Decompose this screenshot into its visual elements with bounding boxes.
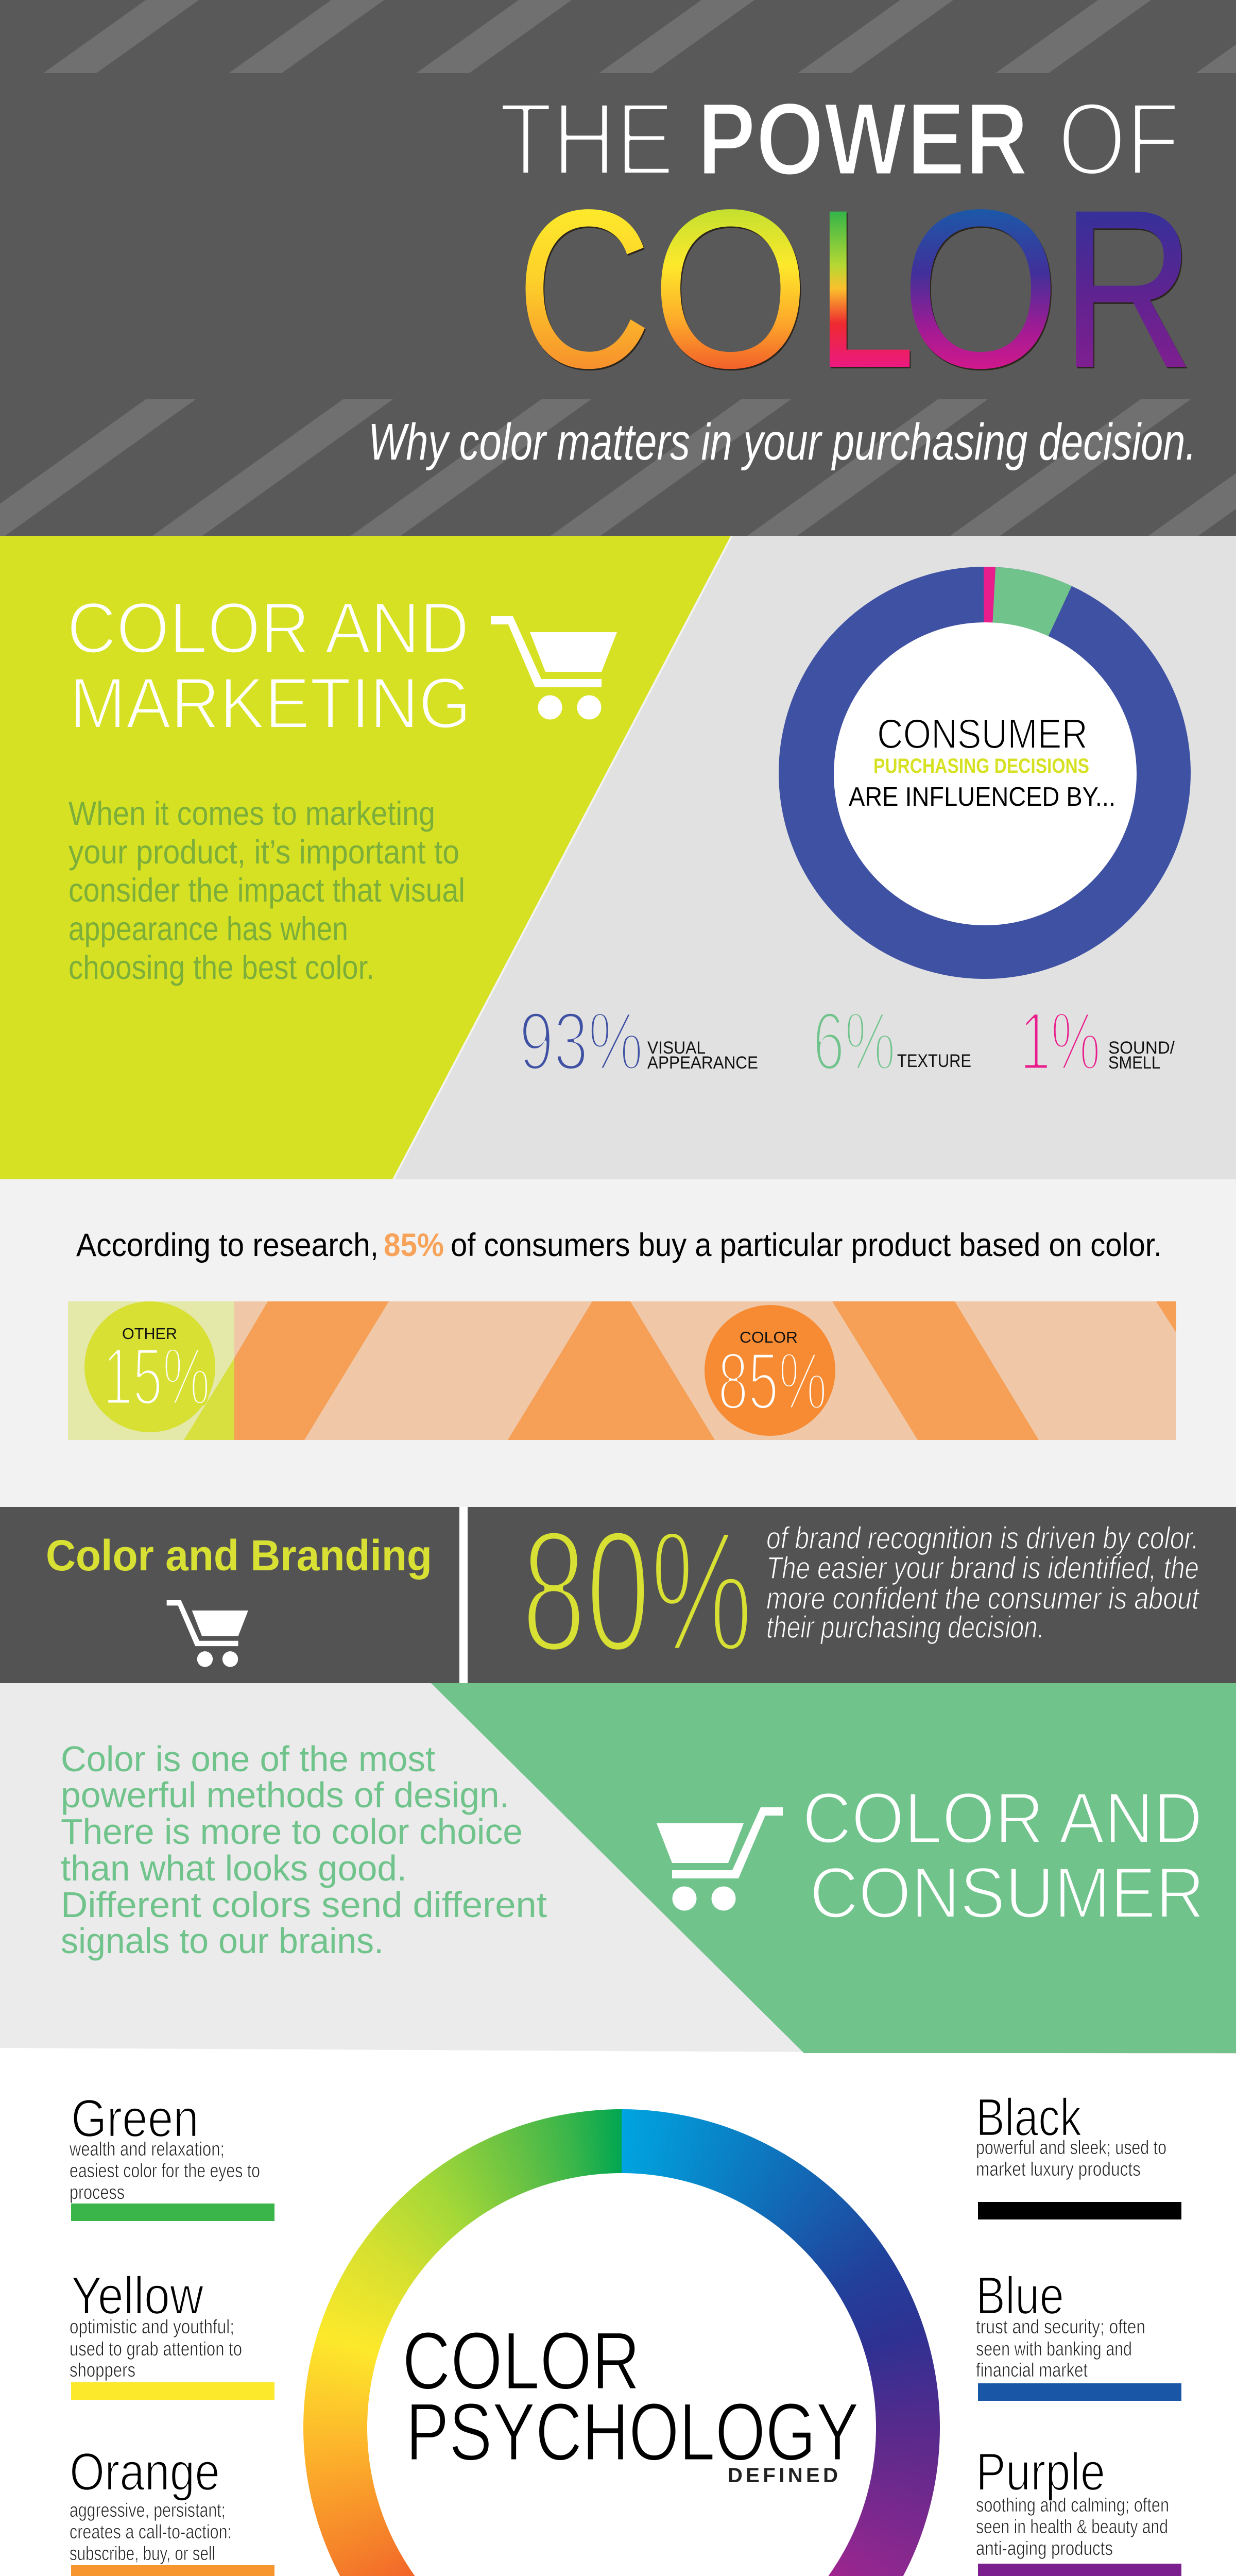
legend: blue: Blue [976, 2266, 1064, 2325]
title: color: O [901, 162, 1060, 415]
legend: black: market luxury products [976, 2159, 1141, 2180]
heading: color and marketing: MARKETING [70, 663, 471, 743]
legend: yellow: optimistic and youthful; [70, 2316, 234, 2338]
title: color [516, 162, 1195, 415]
legend: blue: trust and security; often [976, 2316, 1145, 2338]
title: the power of: THE [499, 81, 674, 197]
text block: consumer intro: There is more to color choice [61, 1811, 523, 1852]
legend: blue [976, 2266, 1181, 2401]
stat: 6% texture: 6% [813, 995, 896, 1087]
title: the power of: OF [1058, 81, 1180, 197]
legend: yellow: shoppers [70, 2360, 135, 2381]
title: the power of: POWER [697, 81, 1028, 197]
color wheel [303, 2109, 940, 2576]
legend: black [976, 2088, 1181, 2219]
panel: color and marketing [0, 536, 1236, 1179]
legend: black: powerful and sleek; used to [976, 2137, 1166, 2159]
text block: marketing intro: choosing the best color. [68, 948, 374, 986]
stat: 93% visual appearance: VISUAL [647, 1038, 706, 1058]
legend: orange [70, 2442, 274, 2576]
text block: marketing intro: consider the impact that visual [68, 871, 465, 909]
legend: purple [976, 2442, 1181, 2576]
legend: yellow: used to grab attention to [70, 2338, 242, 2360]
sentence: 85% of consumers: According to research, [76, 1227, 379, 1263]
stat: 1% sound/smell: SOUND/ [1108, 1038, 1175, 1058]
legend: black: Black [976, 2088, 1082, 2147]
panel: 85 percent research [0, 1179, 1236, 1507]
panel: color and branding [0, 1495, 1236, 1687]
legend: green: easiest color for the eyes to [70, 2160, 260, 2182]
text block: brand recognition: their purchasing decision. [766, 1610, 1044, 1645]
stat: 93% visual appearance: 93% [519, 995, 643, 1087]
legend: purple: anti-aging products [976, 2538, 1113, 2560]
stat: 93% visual appearance: APPEARANCE [647, 1053, 758, 1073]
heading: color and consumer: COLOR AND [802, 1777, 1203, 1858]
legend: purple: soothing and calming; often [976, 2495, 1169, 2516]
text block: consumer intro [61, 1739, 547, 1961]
title: color: L [815, 162, 916, 415]
donut caption [849, 711, 1115, 812]
legend: orange: aggressive, persistant; [70, 2500, 226, 2521]
icon: shopping cart [657, 1807, 783, 1910]
panel: color and consumer [0, 1683, 1236, 2054]
legend: green [69, 2089, 274, 2221]
legend: green: Green [71, 2089, 199, 2148]
heading: color and marketing: COLOR AND [67, 587, 469, 668]
sentence: 85% of consumers [76, 1227, 1162, 1263]
heading: color and marketing [67, 587, 471, 743]
legend: purple: Purple [976, 2442, 1105, 2501]
badge: color 85%: COLOR [740, 1328, 798, 1346]
text block: consumer intro: powerful methods of design. [61, 1775, 509, 1815]
badge: other 15% [84, 1301, 215, 1432]
stat: 93% visual appearance [519, 995, 758, 1087]
legend: blue: financial market [976, 2360, 1088, 2381]
stat: 1% sound/smell: SMELL [1108, 1053, 1160, 1073]
sentence: 85% of consumers: of consumers buy a particular product based on color. [451, 1227, 1162, 1263]
legend: blue: seen with banking and [976, 2338, 1132, 2360]
legend: purple: seen in health & beauty and [976, 2516, 1168, 2538]
heading: color and consumer [802, 1777, 1205, 1933]
heading: color psychology: COLOR [402, 2315, 640, 2406]
title: color: C [516, 162, 652, 415]
donut caption: CONSUMER [877, 711, 1088, 757]
wheel center [367, 2173, 876, 2576]
text block: marketing intro: your product, it’s important to [68, 833, 459, 871]
legend: orange: creates a call-to-action: [70, 2521, 232, 2543]
donut chart: consumer influences [779, 567, 1191, 979]
panel: color psychology [0, 2054, 1236, 2576]
text block: marketing intro: appearance has when [68, 910, 348, 947]
text block: marketing intro [68, 794, 465, 986]
heading: color psychology [402, 2315, 859, 2478]
heading: color psychology: PSYCHOLOGY [406, 2386, 859, 2478]
header stripes bottom [0, 399, 1236, 536]
badge: other 15%: OTHER [122, 1325, 177, 1343]
text block: marketing intro: When it comes to marketing [68, 794, 435, 832]
title: the power of [499, 81, 1180, 197]
title: color: O [651, 162, 810, 415]
text block: consumer intro: signals to our brains. [61, 1921, 384, 1961]
title: color: R [1061, 162, 1195, 415]
stat: 6% texture: TEXTURE [897, 1051, 971, 1071]
stat: 1% sound/smell: 1% [1020, 995, 1101, 1087]
badge: other 15%: 15% [103, 1331, 210, 1422]
header stripes top [43, 0, 1236, 73]
donut caption: ARE INFLUENCED BY... [849, 782, 1115, 812]
panel: header [0, 0, 1236, 536]
legend: yellow [70, 2266, 274, 2400]
text block: consumer intro: than what looks good. [61, 1848, 407, 1888]
text block: brand recognition [766, 1521, 1200, 1645]
stat: 80%: 80% [522, 1495, 753, 1687]
text block: consumer intro: Color is one of the most [61, 1739, 435, 1779]
badge: color 85% [705, 1305, 835, 1436]
heading: color and branding: Color and Branding [46, 1531, 432, 1580]
bar chart: color vs other [68, 1301, 1176, 1440]
text block: consumer intro: Different colors send different [61, 1885, 547, 1925]
legend: yellow: Yellow [71, 2266, 204, 2325]
icon: shopping cart [491, 616, 617, 719]
donut caption: PURCHASING DECISIONS [873, 755, 1089, 777]
icon: shopping cart [167, 1600, 248, 1667]
badge: color 85%: 85% [718, 1336, 827, 1427]
subheading: defined: DEFINED [728, 2464, 838, 2487]
legend: orange: Orange [70, 2442, 220, 2501]
sentence: 85% of consumers: 85% [384, 1227, 444, 1263]
legend: green: wealth and relaxation; [69, 2139, 225, 2160]
legend: green: process [70, 2182, 125, 2204]
legend: orange: subscribe, buy, or sell [70, 2543, 215, 2565]
heading: color and consumer: CONSUMER [810, 1852, 1205, 1933]
